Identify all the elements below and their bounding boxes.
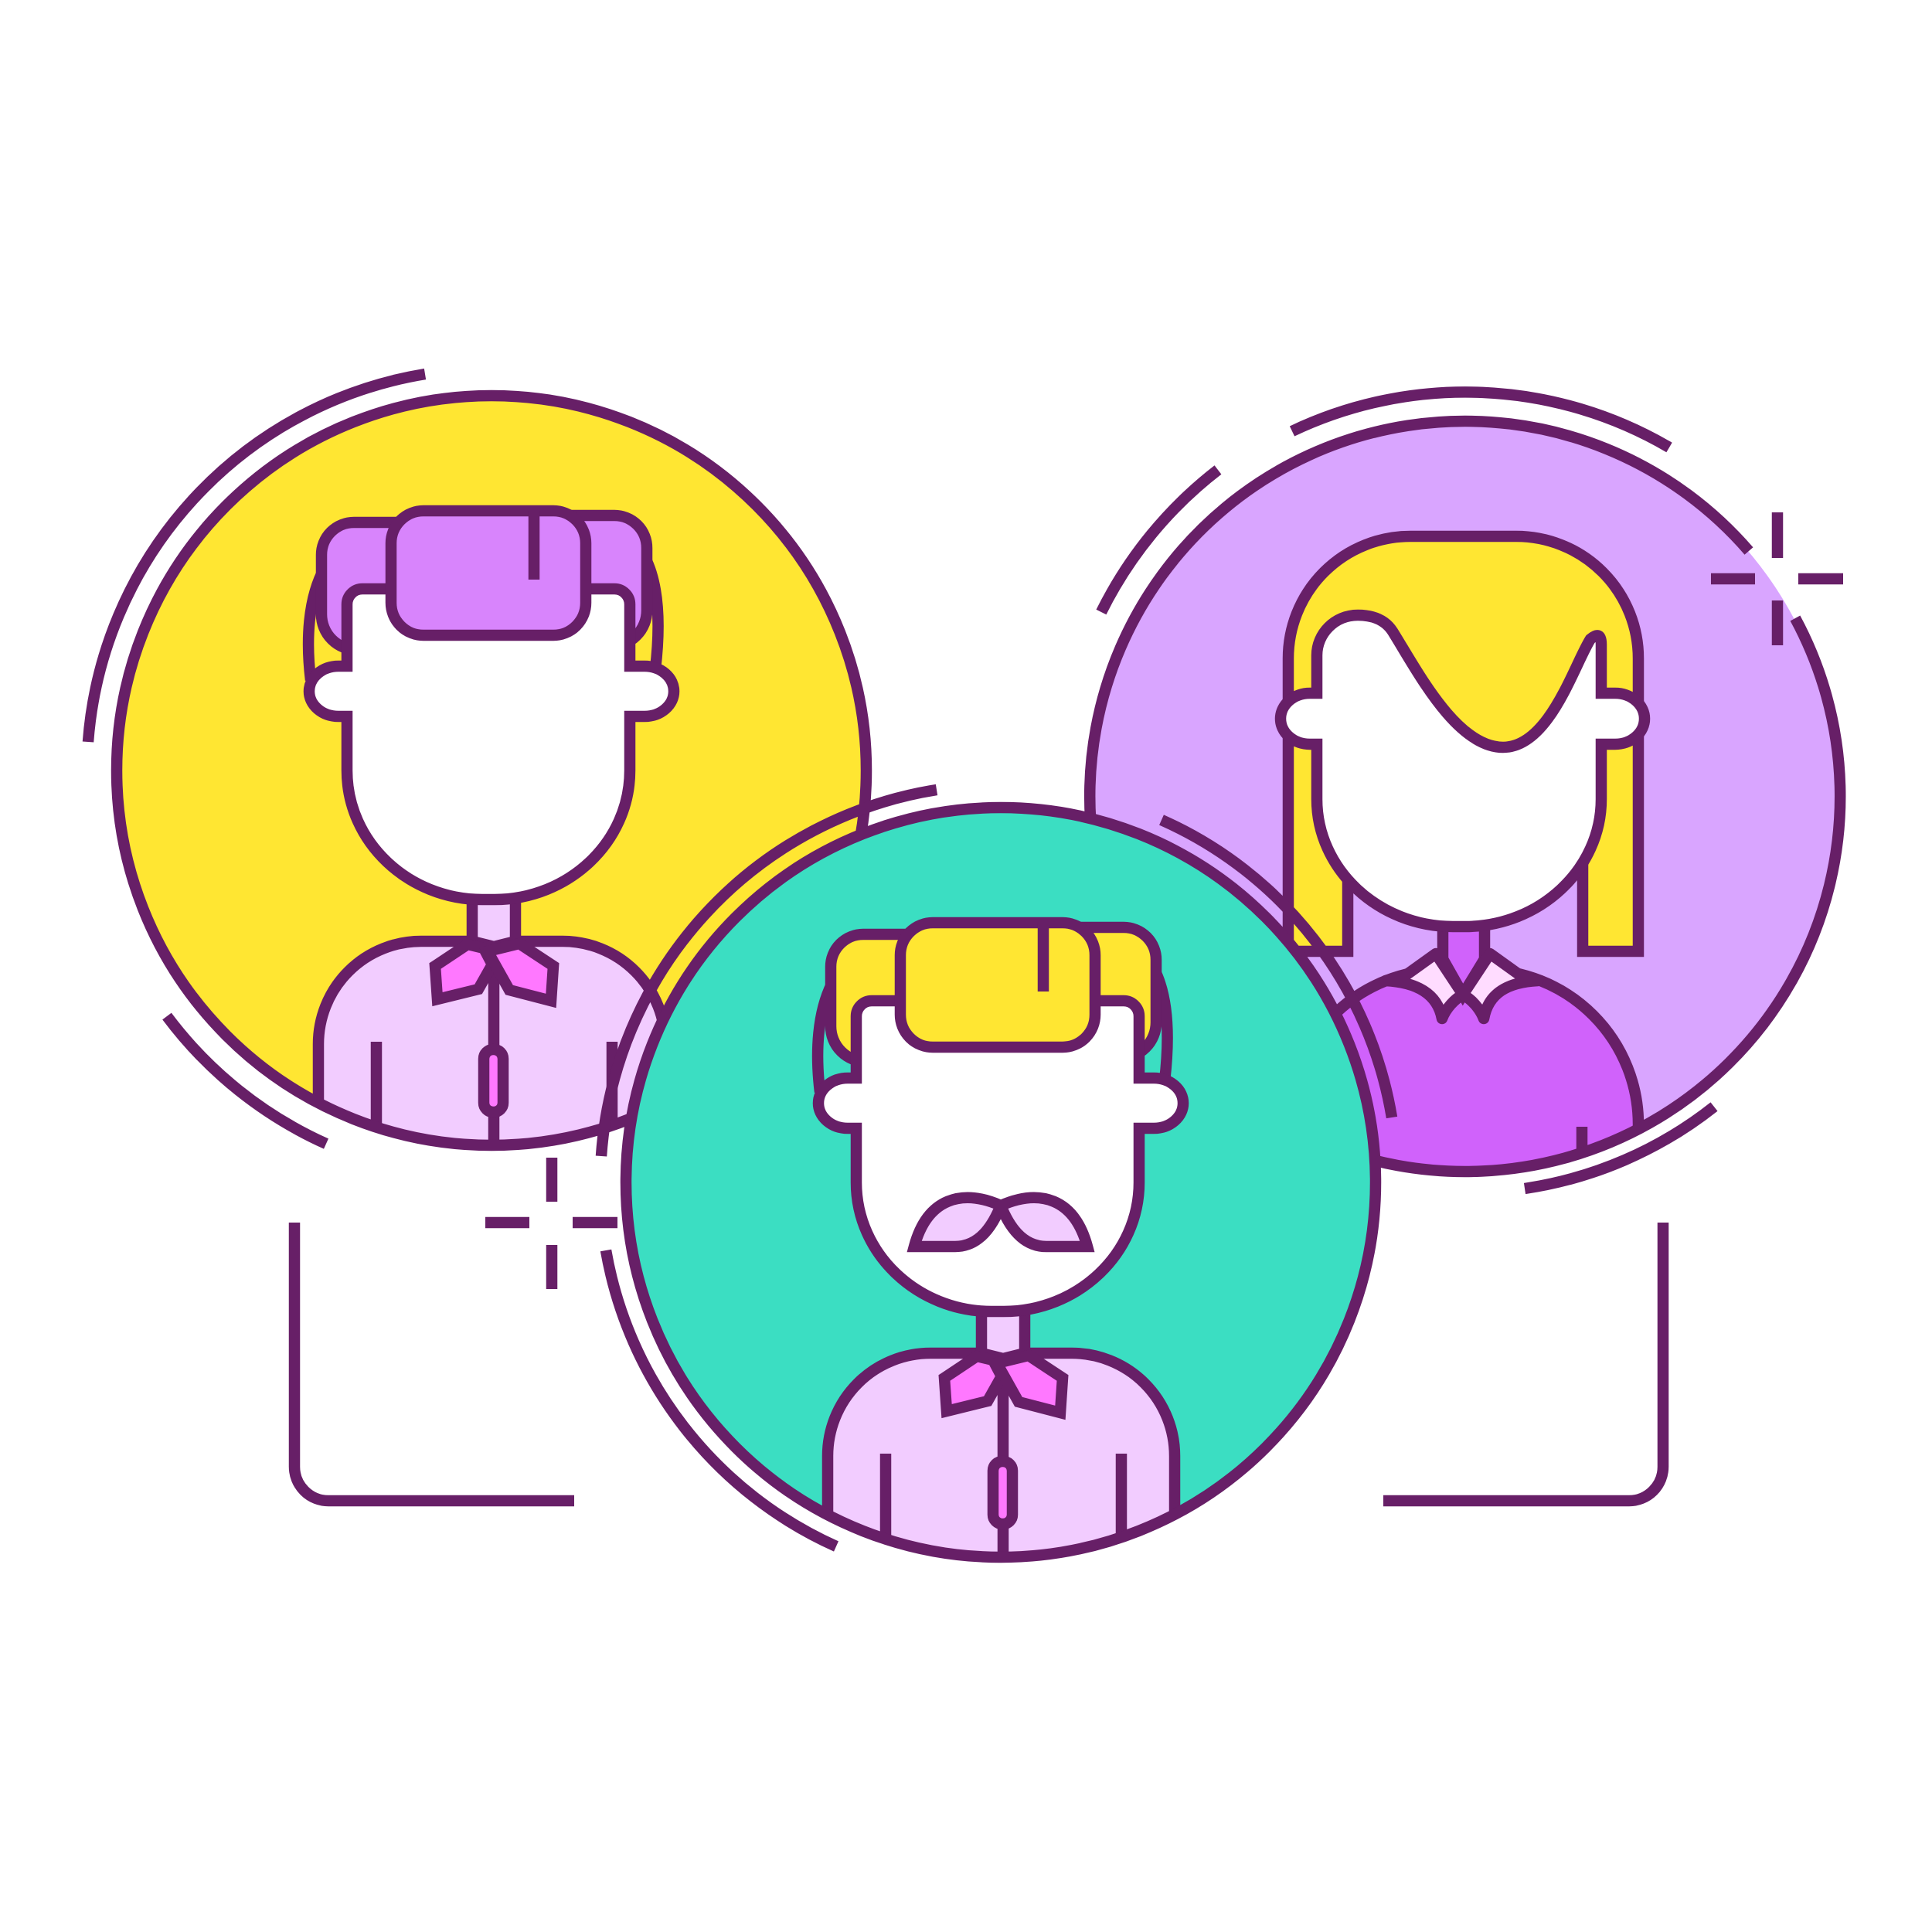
yellow circle outline [117, 396, 866, 1145]
avatar: man with yellow hair and moustache on teal circle [626, 808, 1376, 1648]
figure: man two [818, 923, 1183, 1648]
bracket: lower right [1383, 1223, 1663, 1501]
orbit arcs around purple circle [1101, 392, 1714, 1189]
neck [1443, 912, 1485, 995]
sparkle: lower left [485, 1158, 617, 1289]
right collar [997, 1355, 1063, 1413]
hair [1288, 536, 1638, 951]
side hair [831, 927, 1156, 1062]
face, fringe and ears [1281, 615, 1645, 927]
face and ears [309, 589, 674, 900]
face and ears [818, 1001, 1183, 1311]
figure: man one [308, 511, 674, 1236]
body with shirt [312, 935, 664, 1140]
purple circle background [1087, 419, 1838, 1170]
shirt button [484, 1049, 503, 1112]
moustache [914, 1198, 1087, 1247]
left collar [944, 1356, 1002, 1411]
shirt button [993, 1461, 1012, 1524]
left collar [1386, 954, 1463, 1019]
body [1337, 968, 1645, 1166]
orbit arcs around teal circle [601, 790, 1392, 1546]
avatar: man with purple hair on yellow circle [117, 396, 866, 1236]
top hair block [900, 923, 1095, 1047]
right collar [1463, 954, 1538, 1019]
top hair block [391, 511, 586, 635]
bracket: lower left [294, 1223, 574, 1501]
figure: woman [1281, 536, 1645, 1236]
back hair outline [818, 970, 1168, 1092]
orbit arcs around yellow circle [88, 374, 425, 1144]
sparkle: upper right [1711, 512, 1843, 645]
yellow circle background [117, 396, 866, 1145]
teal circle outline [626, 808, 1376, 1557]
right collar [488, 944, 553, 1001]
left collar [435, 944, 492, 999]
back hair outline [308, 558, 658, 680]
neck [472, 889, 515, 947]
avatar: woman on purple circle [1087, 419, 1840, 1236]
purple circle outline with gap [1090, 421, 1840, 1172]
side hair [321, 515, 647, 650]
neck [981, 1301, 1025, 1359]
body with shirt [822, 1348, 1181, 1552]
teal circle background [626, 808, 1376, 1557]
